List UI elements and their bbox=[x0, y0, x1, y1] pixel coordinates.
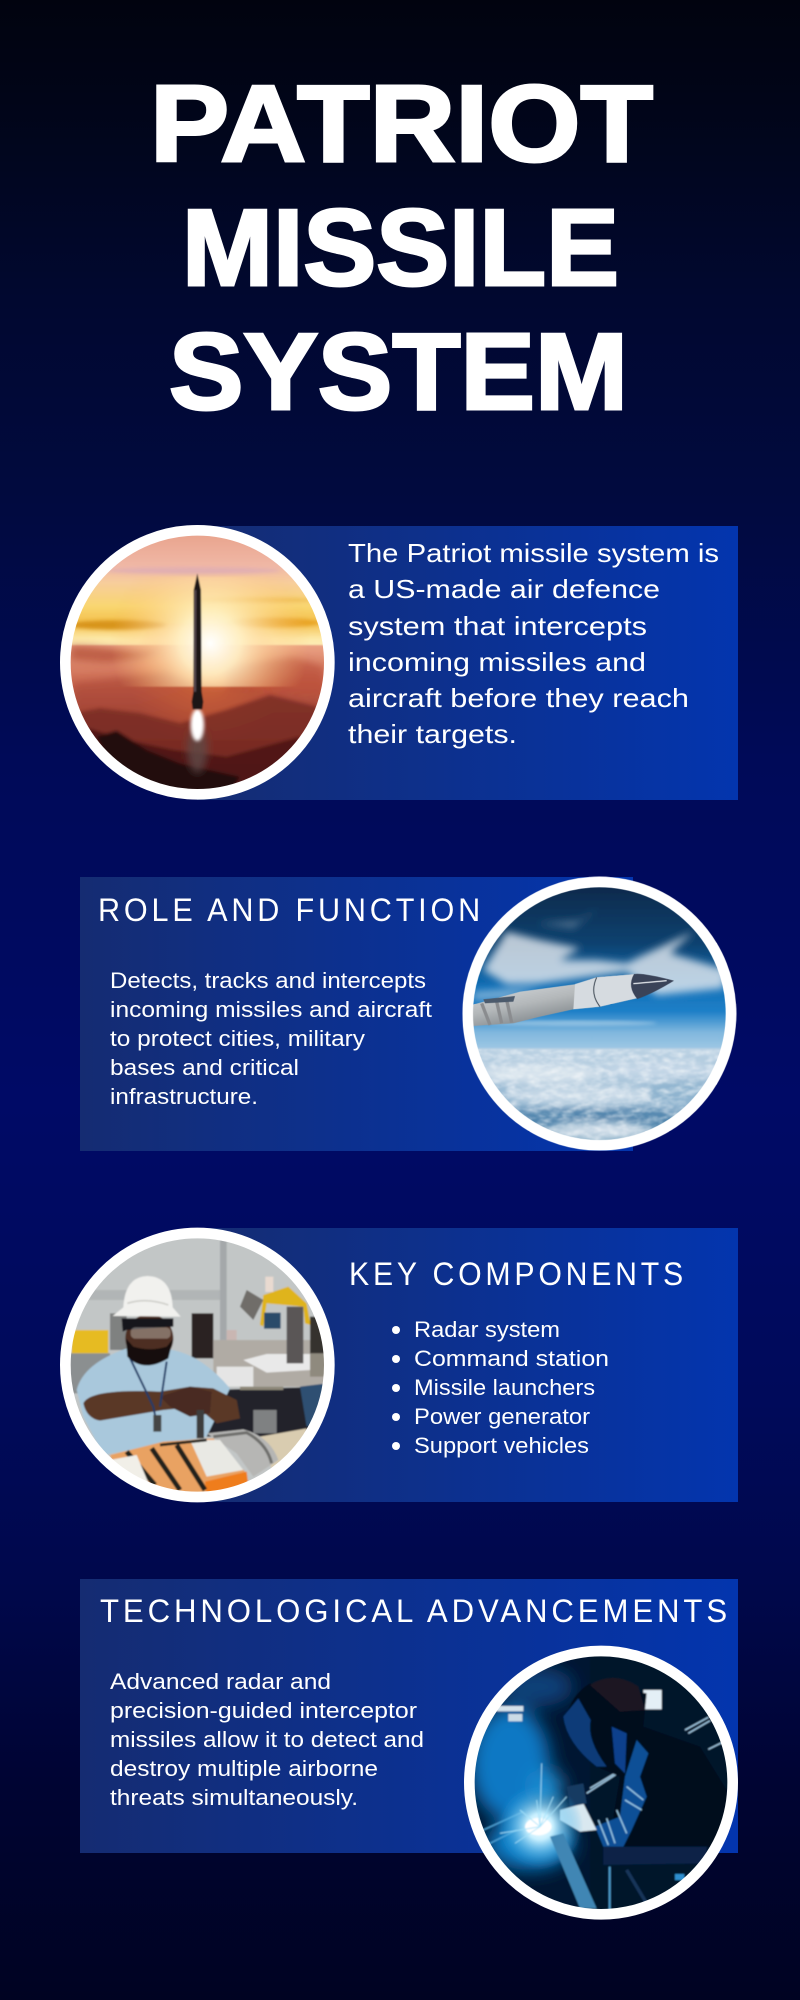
role text: incoming missiles and aircraft bbox=[110, 997, 432, 1022]
intro text: aircraft before they reach bbox=[348, 683, 689, 713]
role text: bases and critical bbox=[110, 1055, 299, 1080]
intro photo: missile launch at sunset bbox=[60, 530, 337, 797]
components list: Command station bbox=[414, 1346, 609, 1371]
title bbox=[150, 63, 653, 433]
components list: Support vehicles bbox=[414, 1433, 589, 1458]
title: PATRIOT bbox=[150, 63, 653, 185]
role photo: interceptor above clouds bbox=[467, 880, 733, 1145]
advancements background bbox=[80, 1579, 738, 1853]
role text: infrastructure. bbox=[110, 1084, 258, 1109]
advancements heading: TECHNOLOGICAL ADVANCEMENTS bbox=[100, 1593, 731, 1629]
advancements text: precision-guided interceptor bbox=[110, 1698, 417, 1723]
title: SYSTEM bbox=[169, 311, 628, 433]
role text: to protect cities, military bbox=[110, 1026, 365, 1051]
advancements text: missiles allow it to detect and bbox=[110, 1727, 424, 1752]
role heading: ROLE AND FUNCTION bbox=[98, 892, 484, 928]
title: MISSILE bbox=[182, 187, 619, 309]
advancements text: destroy multiple airborne bbox=[110, 1756, 378, 1781]
components list: Missile launchers bbox=[414, 1375, 595, 1400]
intro text: system that intercepts bbox=[348, 611, 647, 641]
intro background bbox=[197, 526, 738, 800]
components list: Power generator bbox=[414, 1404, 590, 1429]
components list: Radar system bbox=[414, 1317, 560, 1342]
components photo: worker in hard hat bbox=[65, 1233, 333, 1500]
advancements photo: welder with sparks bbox=[469, 1651, 733, 1914]
advancements text bbox=[110, 1669, 424, 1810]
intro text: incoming missiles and bbox=[348, 647, 646, 677]
intro text: The Patriot missile system is bbox=[348, 538, 719, 568]
panel: technological advancements bbox=[80, 1579, 738, 1914]
role background bbox=[80, 877, 633, 1151]
role text: Detects, tracks and intercepts bbox=[110, 968, 426, 993]
interceptor missile bbox=[472, 974, 674, 1026]
missile bbox=[192, 573, 203, 709]
intro text: a US-made air defence bbox=[348, 574, 660, 604]
intro text bbox=[348, 538, 719, 749]
advancements text: Advanced radar and bbox=[110, 1669, 331, 1694]
panel: key components bbox=[65, 1228, 738, 1502]
components background bbox=[197, 1228, 738, 1502]
advancements text: threats simultaneously. bbox=[110, 1785, 358, 1810]
components list bbox=[392, 1317, 609, 1458]
panel: role and function bbox=[80, 877, 733, 1151]
components heading: KEY COMPONENTS bbox=[349, 1256, 687, 1292]
intro text: their targets. bbox=[348, 719, 517, 749]
role text bbox=[110, 968, 432, 1109]
panel: introduction bbox=[60, 526, 738, 800]
